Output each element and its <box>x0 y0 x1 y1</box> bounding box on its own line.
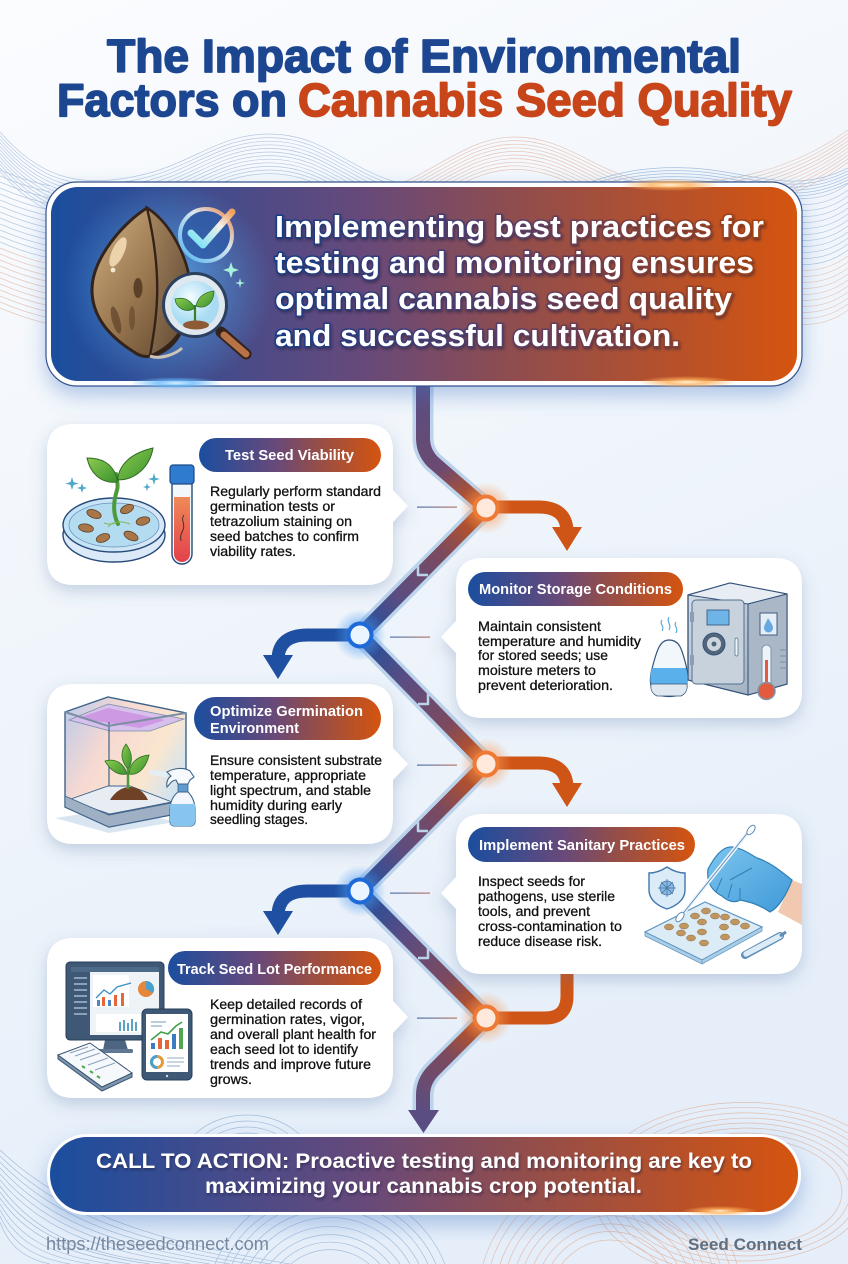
title pill: Optimize Germination Environment: Optimize Germination <box>210 703 363 720</box>
icon: germination chamber with seedling and spray bottle <box>55 697 195 833</box>
title: Cannabis Seed Quality <box>298 74 792 126</box>
text: Monitor Storage Conditions body: moisture meters to <box>478 662 596 678</box>
text: Test Seed Viability body: tetrazolium staining on <box>210 513 352 529</box>
background wave pattern: bottom <box>0 1102 848 1264</box>
text: Implement Sanitary Practices body <box>478 873 622 949</box>
title pill: Optimize Germination Environment <box>194 697 381 740</box>
text: Optimize Germination Environment body: seedling stages. <box>210 811 308 827</box>
panel: Test Seed Viability <box>47 424 408 585</box>
text: Test Seed Viability body: Regularly perform standard <box>210 483 381 499</box>
text: Optimize Germination Environment body <box>210 752 382 827</box>
node: blue 2 <box>334 865 386 917</box>
panel: call to action <box>47 1134 801 1216</box>
text: Optimize Germination Environment body: humidity during early <box>210 797 342 813</box>
text: call to action <box>96 1150 752 1198</box>
panel: Track Seed Lot Performance <box>47 938 408 1098</box>
title pill: Track Seed Lot Performance <box>168 951 381 985</box>
text: Track Seed Lot Performance body <box>210 996 376 1087</box>
title pill: Implement Sanitary Practices: Implement Sanitary Practices <box>479 837 685 854</box>
title pill: Track Seed Lot Performance: Track Seed Lot Performance <box>177 961 372 978</box>
text: Track Seed Lot Performance body: grows. <box>210 1071 252 1087</box>
text: Optimize Germination Environment body: light spectrum, and stable <box>210 782 371 798</box>
text: Implement Sanitary Practices body: reduce disease risk. <box>478 933 602 949</box>
footer: website url: https://theseedconnect.com <box>46 1234 269 1254</box>
text: Test Seed Viability body: seed batches to confirm <box>210 528 359 544</box>
text: hero statement: optimal cannabis seed quality <box>275 281 733 316</box>
arrow: return branch from Implement Sanitary Practices <box>490 970 567 1018</box>
text: Test Seed Viability body: viability rates. <box>210 543 296 559</box>
text: Monitor Storage Conditions body: prevent deterioration. <box>478 677 613 693</box>
text: Track Seed Lot Performance body: and overall plant health for <box>210 1026 376 1042</box>
text: Test Seed Viability body <box>210 483 381 559</box>
icon: petri dish with seedling and test tube <box>63 448 194 564</box>
title: The Impact of Environmental <box>107 30 741 82</box>
panel: hero banner <box>46 179 802 390</box>
icon: gloved hand, swab, seed tray, shield and vial <box>645 824 802 964</box>
node: orange 1 <box>460 482 512 534</box>
text: Monitor Storage Conditions body: Maintain consistent <box>478 618 601 634</box>
title <box>57 30 792 126</box>
title pill: Test Seed Viability: Test Seed Viability <box>225 447 355 464</box>
background wave pattern: top left <box>0 132 395 324</box>
text: Track Seed Lot Performance body: each seed lot to identify <box>210 1041 358 1057</box>
text: hero statement: Implementing best practices for <box>275 209 764 244</box>
text: hero statement: testing and monitoring ensures <box>275 245 754 280</box>
text: Implement Sanitary Practices body: cross-contamination to <box>478 918 622 934</box>
text: Monitor Storage Conditions body: temperature and humidity <box>478 633 641 649</box>
connector ticks <box>390 507 457 1019</box>
arrow: branch to Optimize Germination Environment <box>263 635 356 679</box>
footer: brand name: Seed Connect <box>688 1235 802 1254</box>
flow path: connector timeline <box>360 385 486 1112</box>
arrow: branch to Monitor Storage Conditions <box>490 507 582 551</box>
title pill: Optimize Germination Environment: Environment <box>210 720 299 737</box>
node: orange 2 <box>460 738 512 790</box>
arrow: branch to Track Seed Lot Performance <box>263 891 356 935</box>
title pill: Implement Sanitary Practices <box>468 827 695 862</box>
text: hero statement: and successful cultivation. <box>275 318 680 353</box>
title pill: Monitor Storage Conditions <box>468 572 683 606</box>
text: call to action: maximizing your cannabis crop potential. <box>205 1175 642 1198</box>
text: hero statement <box>275 209 764 353</box>
text: Test Seed Viability body: germination tests or <box>210 498 335 514</box>
text: Optimize Germination Environment body: Ensure consistent substrate <box>210 752 382 768</box>
text: call to action: CALL TO ACTION: Proactive testing and monitoring are key to <box>96 1150 752 1173</box>
title pill: Test Seed Viability <box>199 438 381 472</box>
text: Monitor Storage Conditions body: for stored seeds; use <box>478 647 608 663</box>
icon: dashboard monitor, tablet and seed log <box>58 962 192 1091</box>
node: orange 3 <box>460 992 512 1044</box>
node: blue 1 <box>334 609 386 661</box>
panel: Implement Sanitary Practices <box>441 814 802 974</box>
text: Implement Sanitary Practices body: pathogens, use sterile <box>478 888 615 904</box>
text: Optimize Germination Environment body: temperature, appropriate <box>210 767 366 783</box>
text: Implement Sanitary Practices body: Inspect seeds for <box>478 873 585 889</box>
text: Implement Sanitary Practices body: tools, and prevent <box>478 903 590 919</box>
icon: seed with check mark and magnifier <box>92 208 246 357</box>
background wave pattern: top right <box>395 130 848 324</box>
text: Track Seed Lot Performance body: germination rates, vigor, <box>210 1011 365 1027</box>
arrow: final flow arrowhead <box>408 1110 439 1133</box>
icon: storage safe, humidifier and thermometer <box>650 583 788 700</box>
text: Track Seed Lot Performance body: Keep detailed records of <box>210 996 362 1012</box>
title pill: Monitor Storage Conditions: Monitor Storage Conditions <box>479 581 672 598</box>
panel: Monitor Storage Conditions <box>441 558 802 718</box>
arrow: branch to Implement Sanitary Practices <box>490 763 582 807</box>
text: Monitor Storage Conditions body <box>478 618 641 693</box>
panel: Optimize Germination Environment <box>47 684 408 844</box>
title: Factors on <box>57 74 287 126</box>
text: Track Seed Lot Performance body: trends and improve future <box>210 1056 371 1072</box>
